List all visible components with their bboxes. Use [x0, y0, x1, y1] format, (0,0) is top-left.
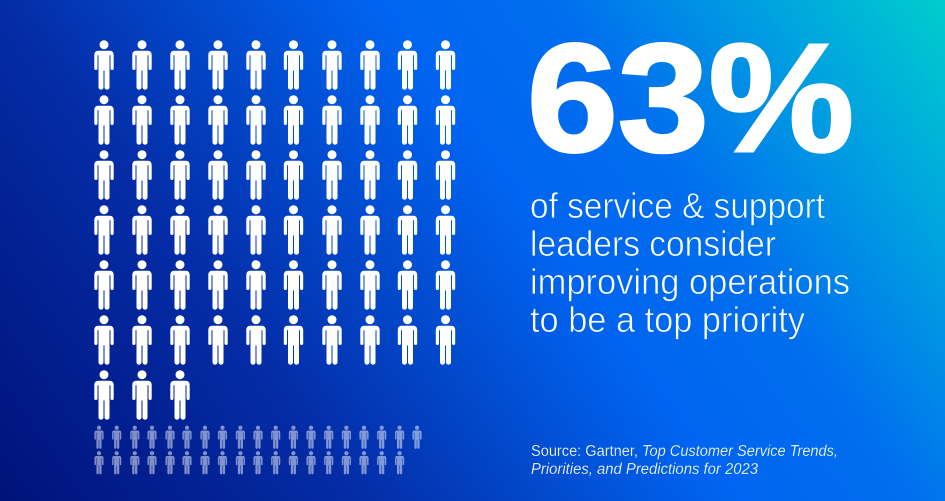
description text: to be a top priority — [530, 299, 805, 340]
source citation — [531, 443, 838, 478]
icon grid: 63 highlighted people — [94, 40, 455, 420]
source citation: Source: Gartner, Top Customer Service Trends, — [531, 443, 838, 460]
icon grid: 37 dimmed people — [94, 426, 422, 474]
big statistic: 63% — [527, 12, 854, 184]
description text: improving operations — [530, 261, 850, 302]
description text: of service & support — [530, 185, 825, 226]
description text: leaders consider — [530, 223, 776, 264]
description text — [530, 185, 850, 340]
source citation: Priorities, and Predictions for 2023 — [531, 461, 758, 478]
